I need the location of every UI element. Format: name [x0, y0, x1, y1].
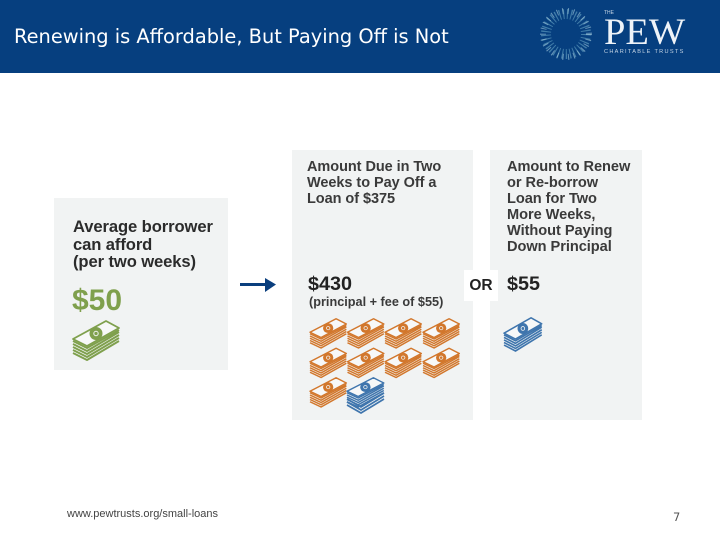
text: amount due in two weeks	[307, 159, 441, 207]
text: amount to renew: Amount to Renew	[507, 159, 630, 175]
text: average borrower can afford	[73, 217, 213, 271]
logo wordmark: The Pew Charitable Trusts: PEW	[604, 12, 685, 53]
panel: borrower can afford	[54, 198, 228, 370]
text: amount due in two weeks: Amount Due in Two	[307, 159, 441, 175]
panel: amount due to pay off	[292, 150, 473, 420]
text: amount due in two weeks: Loan of $375	[307, 191, 395, 207]
icon: blue money stack in principal group	[347, 378, 384, 413]
page number: 7	[673, 510, 680, 524]
OR label: OR	[469, 277, 493, 294]
logo sunburst	[543, 11, 589, 57]
OR label	[464, 270, 498, 301]
source url: www.pewtrusts.org/small-loans	[67, 508, 218, 520]
text: amount to renew: or Re-borrow	[507, 175, 598, 191]
text: amount to renew: Without Paying	[507, 223, 612, 239]
text: amount to renew: Loan for Two	[507, 191, 597, 207]
logo wordmark: The Pew Charitable Trusts: CHARITABLE TRUSTS	[604, 49, 685, 55]
text: average borrower can afford: Average borrower	[73, 217, 213, 236]
header bar	[0, 0, 720, 73]
title: Renewing is Affordable, But Paying Off is Not	[14, 25, 449, 48]
amount: $50: $50	[72, 284, 122, 317]
amount: $55: $55	[507, 273, 540, 295]
text: average borrower can afford: (per two weeks)	[73, 252, 196, 271]
icon: blue money stack for renewal	[504, 318, 542, 351]
text: amount due in two weeks: Weeks to Pay Off a	[307, 175, 436, 191]
text: amount to renew	[507, 159, 630, 255]
icons: orange money stacks	[310, 319, 459, 407]
logo wordmark: The Pew Charitable Trusts: THE	[604, 10, 614, 16]
text: average borrower can afford: can afford	[73, 234, 152, 254]
icon: green money stack	[73, 321, 119, 360]
text: amount to renew: Down Principal	[507, 239, 612, 255]
arrow	[240, 278, 276, 292]
panel: amount to renew	[490, 150, 642, 420]
amount: $430: $430	[308, 273, 352, 295]
text: amount to renew: More Weeks,	[507, 207, 595, 223]
text: principal plus fee: (principal + fee of $55)	[309, 295, 443, 309]
